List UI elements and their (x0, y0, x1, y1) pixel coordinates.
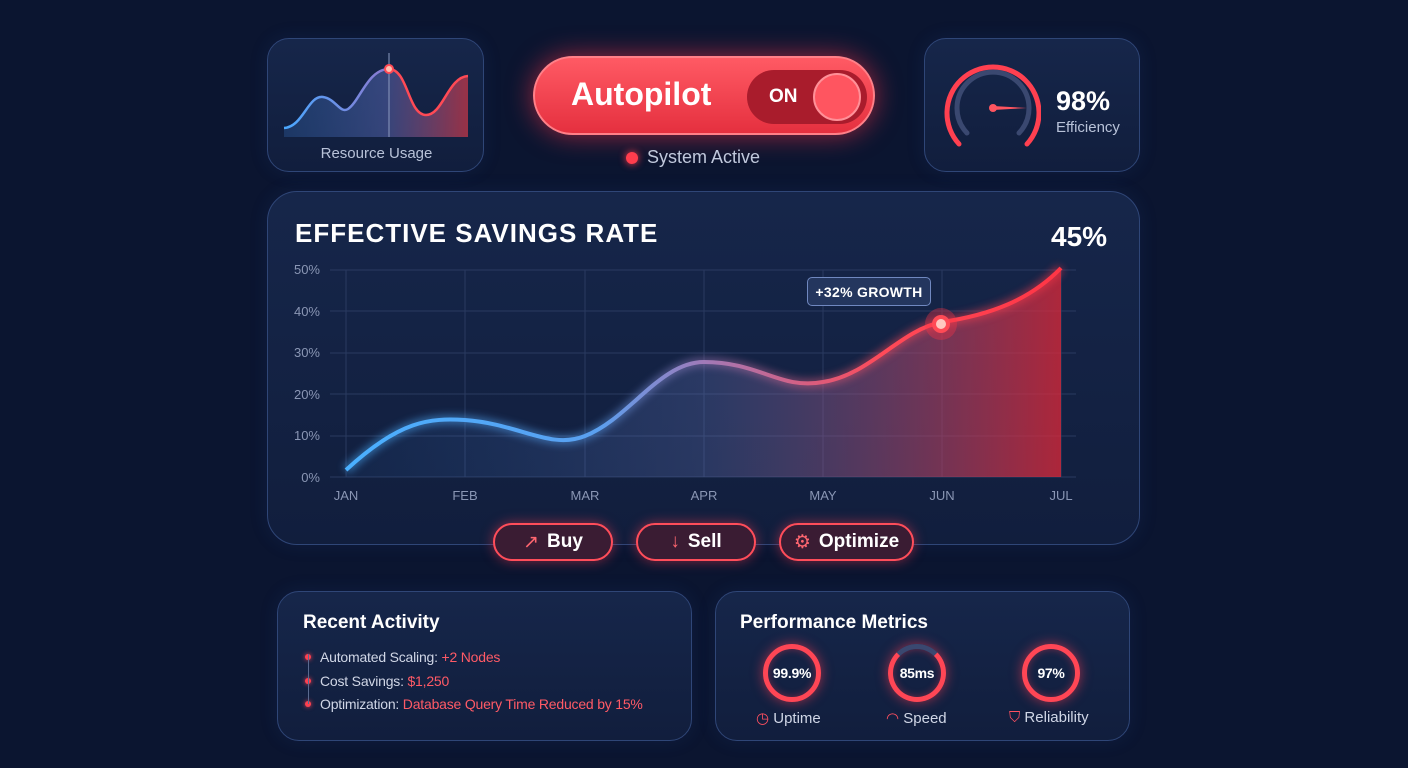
button: buy: Buy (547, 531, 583, 552)
callout: +32% growth (807, 277, 931, 306)
status: system active (620, 146, 760, 170)
metric: speed (888, 644, 946, 702)
line chart: 40% (294, 304, 320, 319)
panel: efficiency (924, 38, 1140, 172)
button: sell: ↓ (670, 531, 680, 552)
button: buy: ↗ (523, 532, 539, 552)
line chart: 20% (294, 387, 320, 402)
panel: performance metrics: ◷ Uptime (756, 710, 821, 727)
panel: recent activity: Recent Activity (303, 612, 440, 633)
line chart: MAY (809, 488, 837, 503)
button: optimize (779, 523, 914, 561)
metric: reliability: 97% (1037, 665, 1065, 681)
callout: +32% growth: +32% GROWTH (815, 284, 923, 300)
panel: resource usage (267, 38, 484, 172)
activity list: Automated Scaling: +2 Nodes (320, 649, 500, 665)
line chart: JUL (1049, 488, 1073, 503)
button: optimize: Optimize (819, 531, 899, 552)
panel: performance metrics: Performance Metrics (740, 612, 928, 633)
panel: performance metrics (715, 591, 1130, 741)
activity list: Cost Savings: $1,250 (320, 672, 449, 688)
line chart: 0% (301, 470, 320, 485)
panel: performance metrics: ◠ Speed (886, 710, 947, 727)
activity list: Optimization: Database Query Time Reduced by 15% (320, 696, 643, 712)
value: 45%: 45% (1051, 221, 1107, 252)
panel: effective savings rate chart (267, 191, 1140, 545)
metric: uptime: 99.9% (773, 665, 811, 681)
value: 98% efficiency: 98% (1056, 86, 1110, 116)
heading: EFFECTIVE SAVINGS RATE (295, 218, 658, 248)
panel: performance metrics: ⛉ Reliability (1009, 709, 1089, 726)
metric: uptime (763, 644, 821, 702)
switch: ON (747, 70, 867, 124)
button: sell: Sell (688, 531, 722, 552)
button: buy (493, 523, 613, 561)
metric: speed: 85ms (900, 665, 934, 681)
panel: efficiency: Efficiency (1056, 119, 1120, 136)
metric: reliability (1022, 644, 1080, 702)
button: sell (636, 523, 756, 561)
line chart: APR (691, 488, 717, 503)
toggle: autopilot: Autopilot (571, 76, 711, 112)
icon: gauge (944, 64, 1041, 146)
toggle: autopilot (533, 56, 875, 135)
label: resource usage: Resource Usage (321, 145, 432, 162)
line chart: JAN (334, 488, 358, 503)
button: optimize: ⚙ (794, 532, 811, 552)
line chart: FEB (452, 488, 478, 503)
switch: ON: ON (769, 86, 798, 107)
activity list (302, 649, 643, 712)
line chart: 50% (294, 262, 320, 277)
status: system active: System Active (647, 147, 760, 167)
chart: resource usage wave (284, 53, 468, 137)
line chart: 10% (294, 428, 320, 443)
line chart: MAR (571, 488, 599, 503)
line chart: JUN (929, 488, 955, 503)
panel: recent activity (277, 591, 692, 741)
line chart: 30% (294, 345, 320, 360)
